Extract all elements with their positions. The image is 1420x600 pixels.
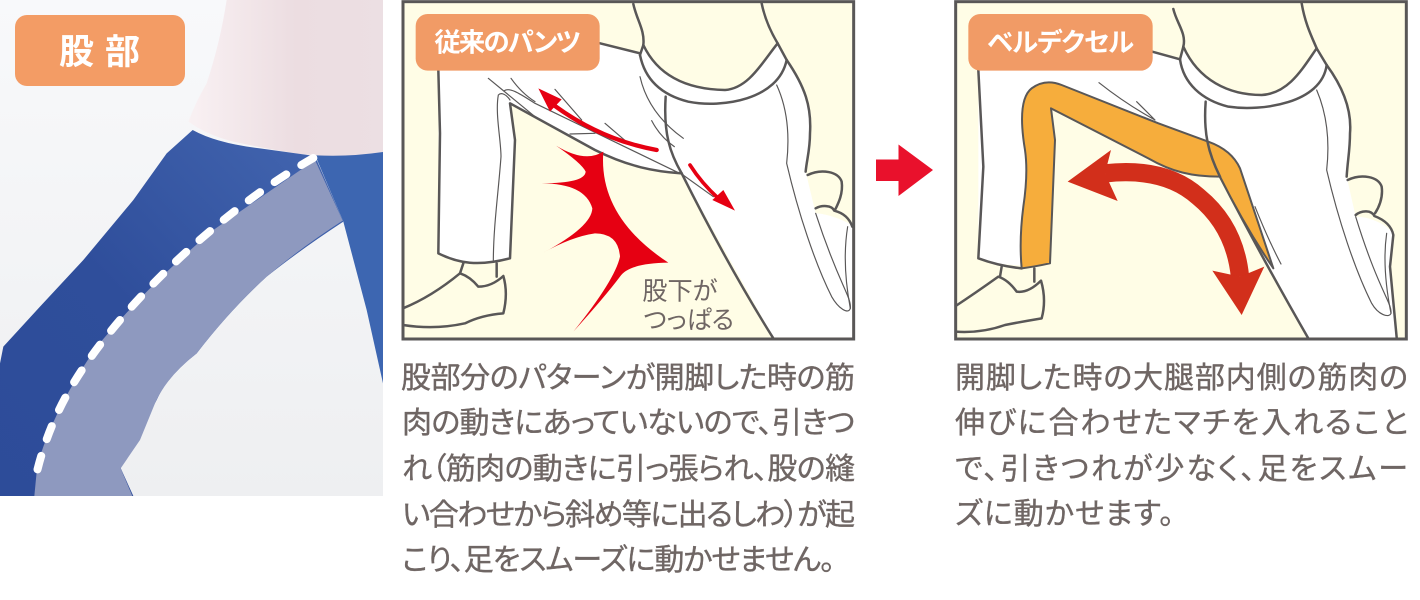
panel: photo of crotch area (0, 0, 383, 496)
photo: highlighted gusset (34, 160, 343, 496)
text block: Bel Dexel description: で、引きつれが少なく、足をスムー (955, 453, 1408, 486)
text block: Bel Dexel description: 開脚した時の大腿部内側の筋肉の (955, 362, 1408, 395)
illustration: outlines (403, 3, 852, 338)
illustration: trouser fill (438, 43, 852, 337)
illustration: centre seam over gusset (1205, 102, 1220, 177)
label: conventional trousers (416, 14, 600, 71)
text block: conventional trousers description: 肉の動きにあっていないので、引きつ (402, 407, 855, 440)
arrow: red tension arrow up-left (538, 88, 657, 150)
dashed seam line (34, 158, 313, 483)
panel: Bel Dexel illustration (956, 2, 1406, 339)
arrow: between panels (876, 144, 933, 196)
frame (956, 2, 1406, 339)
label: Bel Dexel (968, 14, 1153, 71)
arrow: double-headed stretch arrow (1068, 150, 1264, 315)
label: conventional trousers: 従来のパンツ (434, 28, 581, 58)
text block: Bel Dexel description: ズに動かせます。 (955, 498, 1174, 531)
frame (403, 2, 854, 339)
text block: Bel Dexel description (955, 362, 1408, 531)
text block: conventional trousers description: こり、足をスムーズに動かせません。 (402, 544, 835, 577)
photo: pink shirt (188, 0, 383, 156)
panel: conventional trousers illustration (403, 2, 854, 339)
annotation: crotch pulling: 股下が (642, 277, 718, 305)
text block: conventional trousers description (401, 362, 855, 577)
illustration: outlines (956, 3, 1397, 338)
label: crotch (15, 15, 185, 86)
annotation: crotch pulling (642, 277, 734, 334)
photo: blue trouser leg (0, 130, 343, 496)
illustration: trouser fill (978, 43, 1397, 337)
text block: conventional trousers description: 股部分のパターンが開脚した時の筋 (401, 362, 855, 395)
photo: far trouser leg (315, 150, 383, 383)
icon: red pain burst (542, 146, 668, 332)
text block: conventional trousers description: い合わせから斜め等に出るしわ）が起 (402, 499, 855, 532)
annotation: crotch pulling: つっぱる (643, 306, 734, 334)
arrow: red tension arrow down-right (690, 165, 735, 211)
illustration: orange gusset (1021, 82, 1273, 268)
label: Bel Dexel: ベルデクセル (987, 28, 1134, 58)
label: crotch: 股部 (59, 33, 151, 72)
text block: Bel Dexel description: 伸びに合わせたマチを入れること (955, 407, 1408, 440)
text block: conventional trousers description: れ（筋肉の動きに引っ張られ、股の縫 (402, 453, 855, 486)
